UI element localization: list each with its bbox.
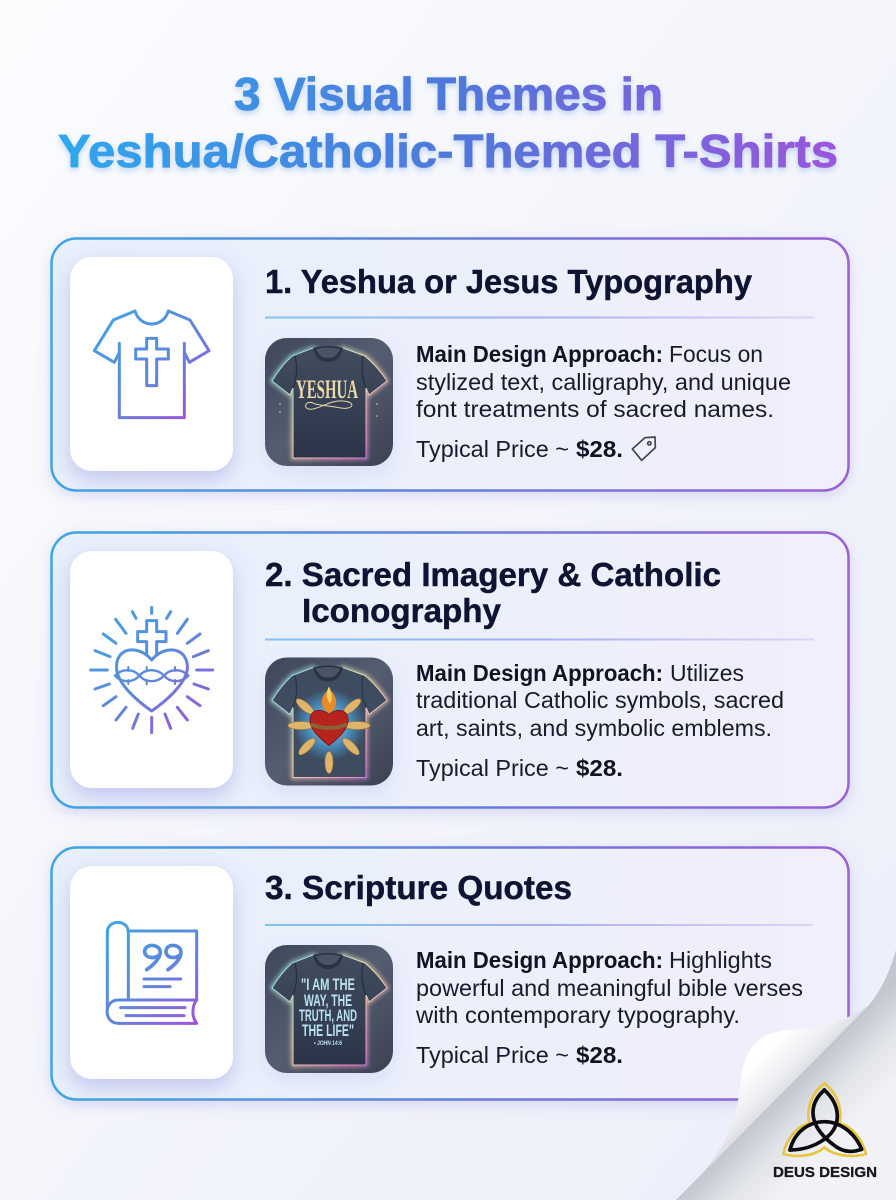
thumbnail: sacred heart shirt [265,658,393,786]
icon: price tag [632,437,655,460]
heading: Iconography [302,592,502,629]
price: $28. [576,436,623,462]
panel: theme 1 [52,238,848,490]
heading: 3. Scripture Quotes [265,869,572,906]
title: Yeshua/Catholic-Themed T-Shirts [58,125,838,177]
thumbnail: scripture shirt: TRUTH, AND [299,1006,357,1025]
description: with contemporary typography. [415,1002,740,1028]
icon card: sacred heart [70,551,233,788]
title: 3 Visual Themes in [234,68,663,120]
heading: 2. Sacred Imagery & Catholic [265,556,721,593]
description: Main Design Approach: [416,341,663,367]
page curl [676,950,896,1200]
logo: Deus Design [773,1083,877,1181]
title [58,68,838,177]
price: Typical Price ~ [416,755,569,781]
price: $28. [576,755,623,781]
description: Main Design Approach: [416,947,663,973]
thumbnail: scripture shirt: WAY, THE [304,991,352,1010]
description: powerful and meaningful bible verses [416,975,803,1001]
description: Focus on [669,341,763,367]
thumbnail: scripture shirt: THE LIFE" [302,1021,354,1040]
price: $28. [576,1042,623,1068]
description [415,947,803,1028]
heading [265,556,721,629]
description: stylized text, calligraphy, and unique [416,369,791,395]
description: Main Design Approach: [416,660,663,686]
description: Highlights [669,947,772,973]
description [416,341,791,422]
icon card: book with quote [70,866,233,1079]
thumbnail: Yeshua shirt: YESHUA [296,375,358,404]
thumbnail: scripture shirt: "I AM THE [301,975,355,994]
thumbnail: scripture shirt [265,945,393,1073]
price: Typical Price ~ [416,436,569,462]
thumbnail: Yeshua shirt [265,338,393,466]
description: Utilizes [670,660,744,686]
heading: 1. Yeshua or Jesus Typography [265,263,753,300]
description [416,660,784,741]
panel: theme 3 [52,848,848,1100]
description: traditional Catholic symbols, sacred [416,687,784,713]
thumbnail: scripture shirt: • JOHN 14:6 [314,1041,343,1047]
panel: theme 2 [52,532,848,808]
logo: Deus Design: DEUS DESIGN [773,1164,877,1181]
price: Typical Price ~ [416,1042,569,1068]
description: art, saints, and symbolic emblems. [416,715,772,741]
icon card: t-shirt with cross [70,257,233,471]
description: font treatments of sacred names. [416,396,774,422]
price [416,436,655,462]
